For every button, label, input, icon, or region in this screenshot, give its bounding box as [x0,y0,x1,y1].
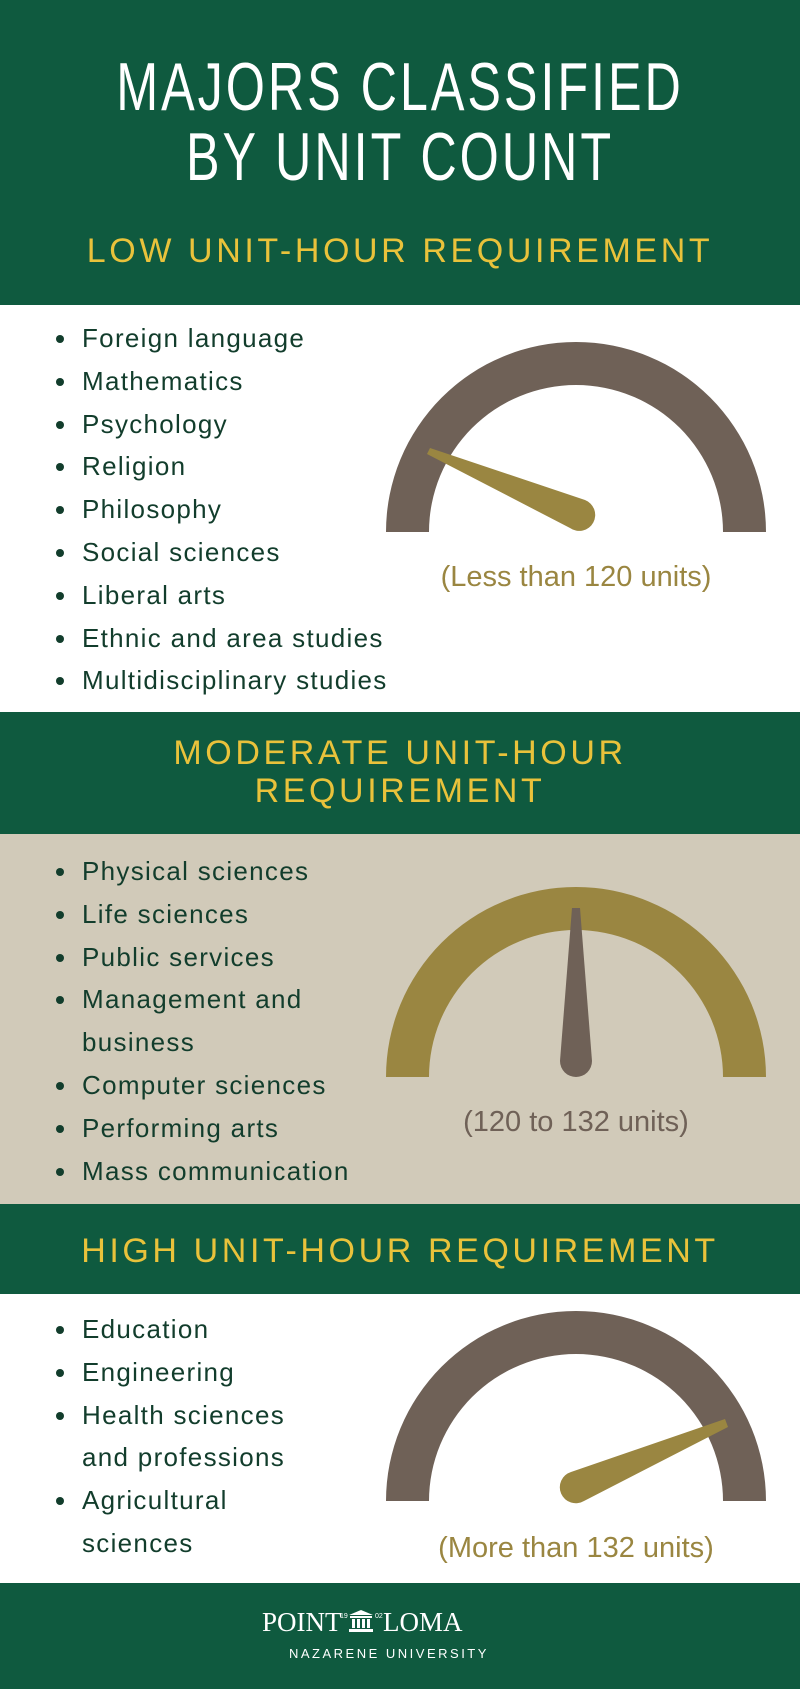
logo: LOMA [383,1607,462,1637]
band: high [0,1204,800,1294]
list: low: Mathematics [82,366,244,396]
list: high [56,1314,285,1558]
list: moderate: Mass communication [82,1156,350,1186]
list: low: Religion [82,451,186,481]
caption: moderate: (120 to 132 units) [463,1106,689,1138]
band: moderate [0,712,800,834]
gauge: moderate [386,887,766,1077]
list: low: Liberal arts [82,580,226,610]
list: low: Philosophy [82,494,222,524]
list: high: Agricultural [82,1485,228,1515]
list: moderate: Life sciences [82,899,249,929]
caption: high: (More than 132 units) [438,1532,714,1564]
caption: low: (Less than 120 units) [441,561,711,593]
list: low: Psychology [82,409,228,439]
heading: moderate: REQUIREMENT [255,772,545,810]
panel: moderate [0,834,800,1204]
list: high: Health sciences [82,1400,285,1430]
gauge: high [386,1311,766,1504]
title: BY UNIT COUNT [186,119,614,195]
heading: high: HIGH UNIT-HOUR REQUIREMENT [81,1232,719,1270]
heading: low: LOW UNIT-HOUR REQUIREMENT [87,232,713,270]
list: low: Social sciences [82,537,281,567]
logo: POINT [262,1607,342,1637]
logo: 19 [340,1613,348,1620]
list: moderate: Management and [82,984,303,1014]
list: high: sciences [82,1528,194,1558]
heading: moderate: MODERATE UNIT-HOUR [173,734,627,772]
list: low: Foreign language [82,323,305,353]
footer band [0,1583,800,1689]
title [116,49,684,195]
logo: NAZARENE UNIVERSITY [289,1646,489,1661]
logo [262,1607,489,1661]
list: moderate: Computer sciences [82,1070,327,1100]
list: high: Engineering [82,1357,235,1387]
list: moderate: Physical sciences [82,856,309,886]
title: MAJORS CLASSIFIED [116,49,684,125]
header band [0,0,800,305]
list: low [56,323,388,695]
list: low: Multidisciplinary studies [82,665,388,695]
list: low: Ethnic and area studies [82,623,384,653]
list: moderate: business [82,1027,195,1057]
list: moderate [56,856,350,1186]
gauge: low [386,342,766,532]
logo: 02 [375,1613,383,1620]
icon: building [349,1610,373,1632]
list: high: and professions [82,1442,285,1472]
list: high: Education [82,1314,209,1344]
heading: moderate [173,734,627,810]
list: moderate: Public services [82,942,275,972]
list: moderate: Performing arts [82,1113,279,1143]
